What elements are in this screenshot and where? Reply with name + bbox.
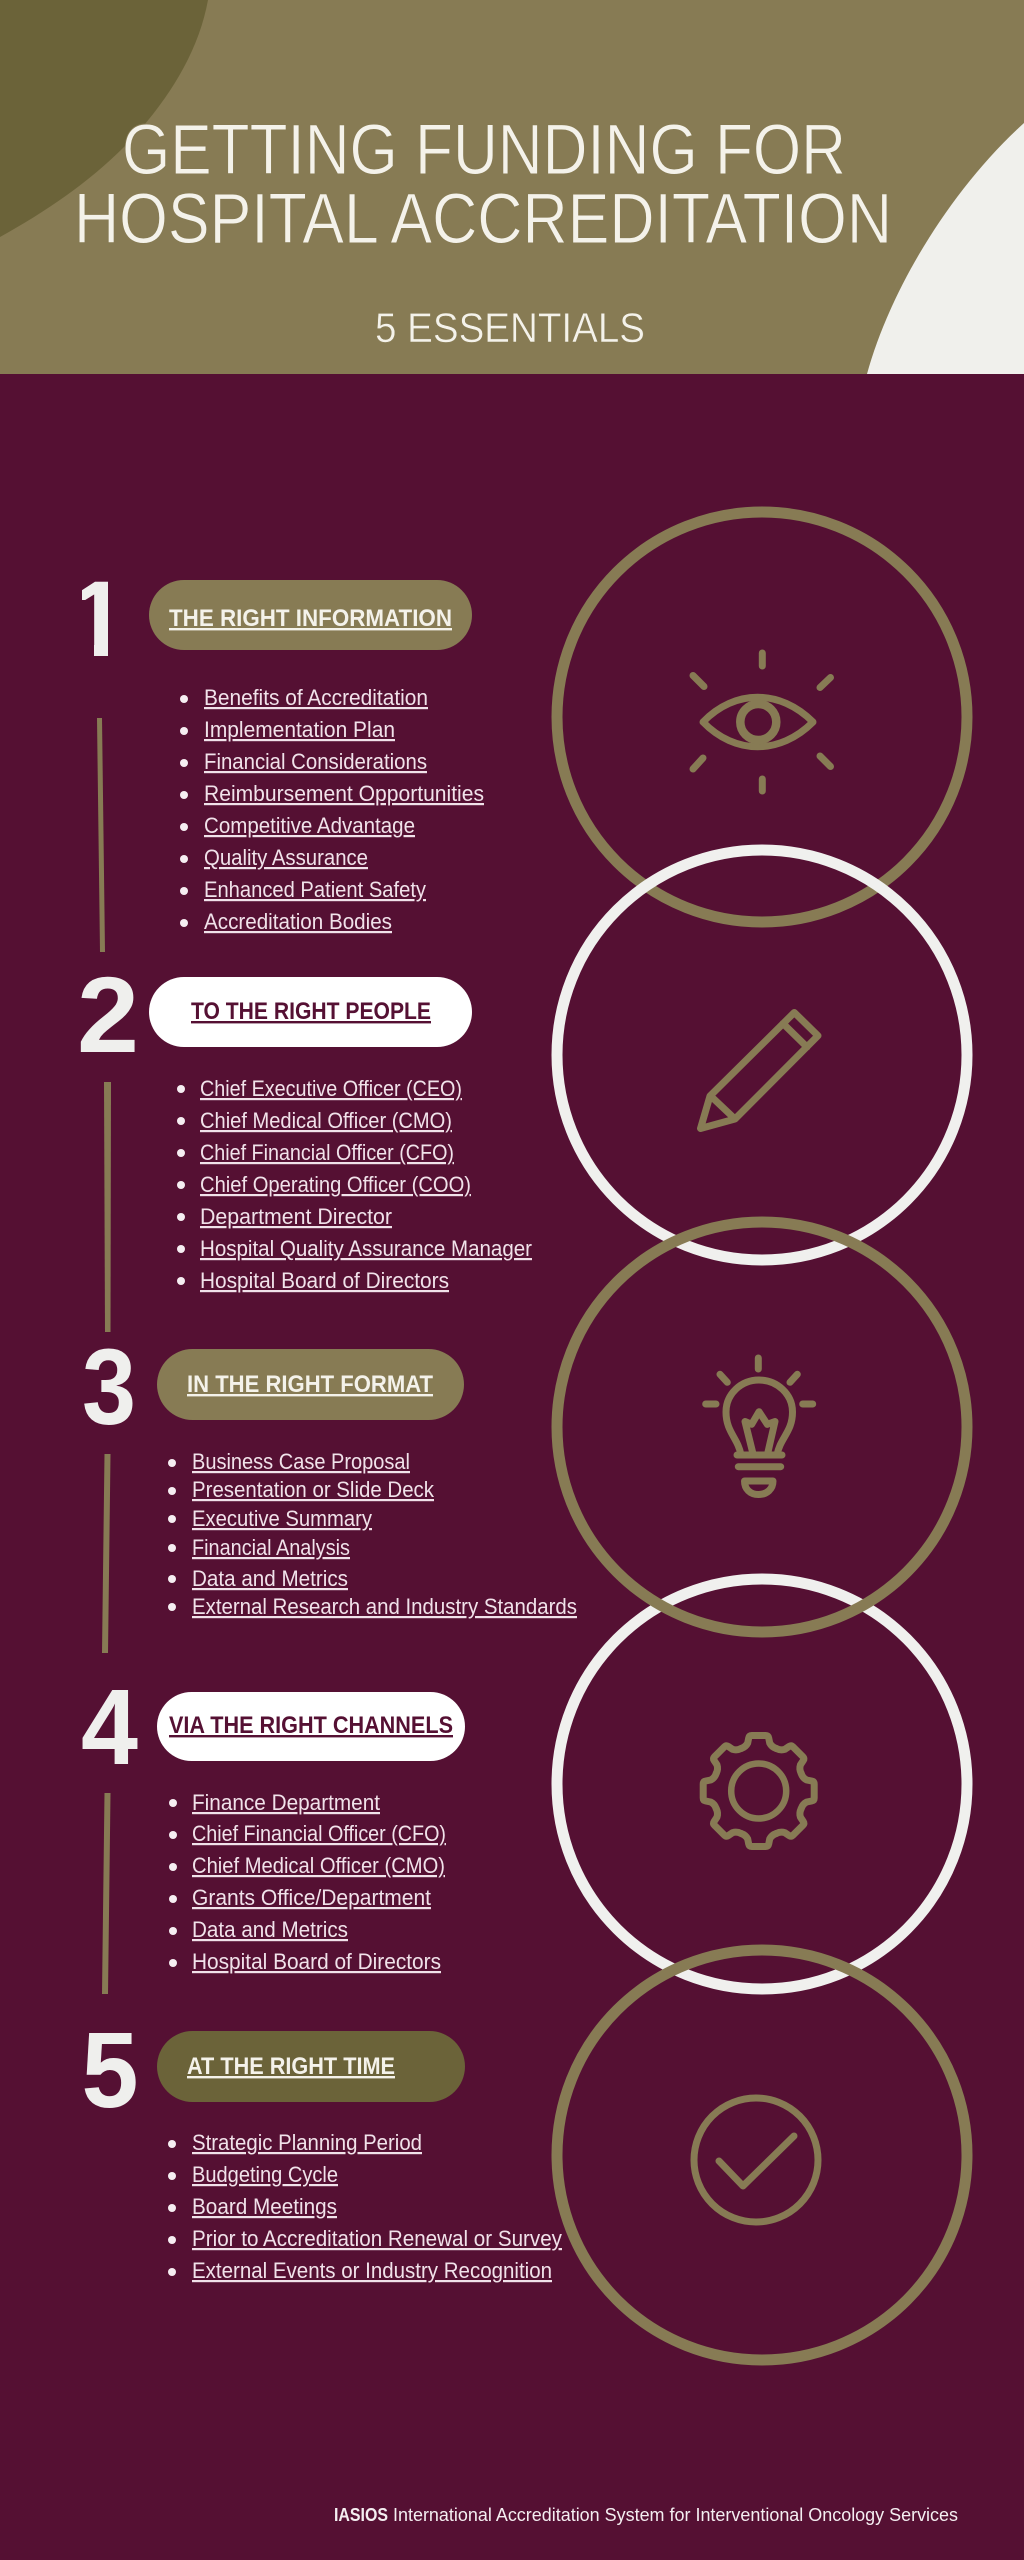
section 5 [82,2009,562,2283]
list 1: Competitive Advantage [204,813,415,838]
circle 3 [557,1222,967,1632]
heading pill 5 [157,2031,465,2102]
heading pill 1 [149,580,472,650]
list 2: Hospital Quality Assurance Manager [200,1236,532,1261]
title: HOSPITAL ACCREDITATION [74,180,892,259]
circle 4 [557,1579,967,1989]
list 3: Data and Metrics [192,1566,348,1591]
number 5: 5 [82,2009,138,2130]
connector line 2 [104,1082,111,1332]
heading pill 5: AT THE RIGHT TIME [187,2053,395,2080]
icon: check mark [694,2098,818,2222]
list 1: Benefits of Accreditation [204,685,428,710]
list 1: Reimbursement Opportunities [204,781,484,806]
list 5: Prior to Accreditation Renewal or Survey [192,2226,562,2251]
list 4: Data and Metrics [192,1917,348,1942]
circle 2 [557,850,967,1260]
list 2 [177,1076,532,1293]
list 1: Quality Assurance [204,845,368,870]
list 5 [168,2130,562,2283]
circle 5 [557,1950,967,2360]
heading pill 4: VIA THE RIGHT CHANNELS [169,1712,453,1739]
heading pill 3 [157,1349,464,1420]
footer: International Accreditation System for Interventional Oncology Services [393,2505,958,2525]
list 1: Enhanced Patient Safety [204,877,426,902]
list 3: External Research and Industry Standards [192,1594,577,1619]
list 4: Finance Department [192,1790,380,1815]
heading pill 4 [157,1692,465,1761]
title [74,111,892,259]
list 3 [168,1449,577,1619]
heading pill 2 [149,977,472,1047]
section 3 [82,1326,577,1653]
section 2 [77,954,532,1332]
list 3: Presentation or Slide Deck [192,1477,435,1502]
list 2: Department Director [200,1204,392,1229]
circle 1 [557,512,967,922]
header banner [0,0,1024,374]
number 4: 4 [81,1666,138,1787]
icon: light bulb [706,1358,813,1494]
connector line 3 [102,1454,110,1653]
icon: gear [703,1736,814,1846]
connector line 4 [102,1793,110,1994]
number 3: 3 [82,1326,136,1447]
list 2: Chief Financial Officer (CFO) [200,1140,454,1165]
list 1: Accreditation Bodies [204,909,392,934]
list 2: Chief Executive Officer (CEO) [200,1076,462,1101]
list 1: Implementation Plan [204,717,395,742]
list 5: External Events or Industry Recognition [192,2258,552,2283]
heading pill 2: TO THE RIGHT PEOPLE [191,998,431,1025]
list 4: Chief Financial Officer (CFO) [192,1821,446,1846]
list 3: Executive Summary [192,1506,372,1531]
list 5: Board Meetings [192,2194,337,2219]
list 5: Budgeting Cycle [192,2162,338,2187]
list 4: Chief Medical Officer (CMO) [192,1853,445,1878]
list 4: Grants Office/Department [192,1885,431,1910]
section 1 [69,558,484,952]
number 1: 1 [69,558,129,679]
connector line 1 [97,718,105,952]
icon: eye [693,653,830,791]
heading pill 3: IN THE RIGHT FORMAT [187,1371,433,1398]
subtitle: 5 ESSENTIALS [375,304,645,351]
list 2: Chief Operating Officer (COO) [200,1172,471,1197]
title: GETTING FUNDING FOR [122,111,846,190]
list 4 [169,1790,446,1974]
list 1: Financial Considerations [204,749,427,774]
list 5: Strategic Planning Period [192,2130,422,2155]
list 1 [180,685,484,934]
icon: pencil [700,1012,818,1128]
number 2: 2 [77,954,139,1075]
list 3: Business Case Proposal [192,1449,410,1474]
footer: IASIOS [334,2505,388,2525]
list 2: Hospital Board of Directors [200,1268,449,1293]
list 2: Chief Medical Officer (CMO) [200,1108,452,1133]
list 3: Financial Analysis [192,1535,350,1560]
section 4 [81,1666,465,1994]
list 4: Hospital Board of Directors [192,1949,441,1974]
heading pill 1: THE RIGHT INFORMATION [169,605,452,632]
